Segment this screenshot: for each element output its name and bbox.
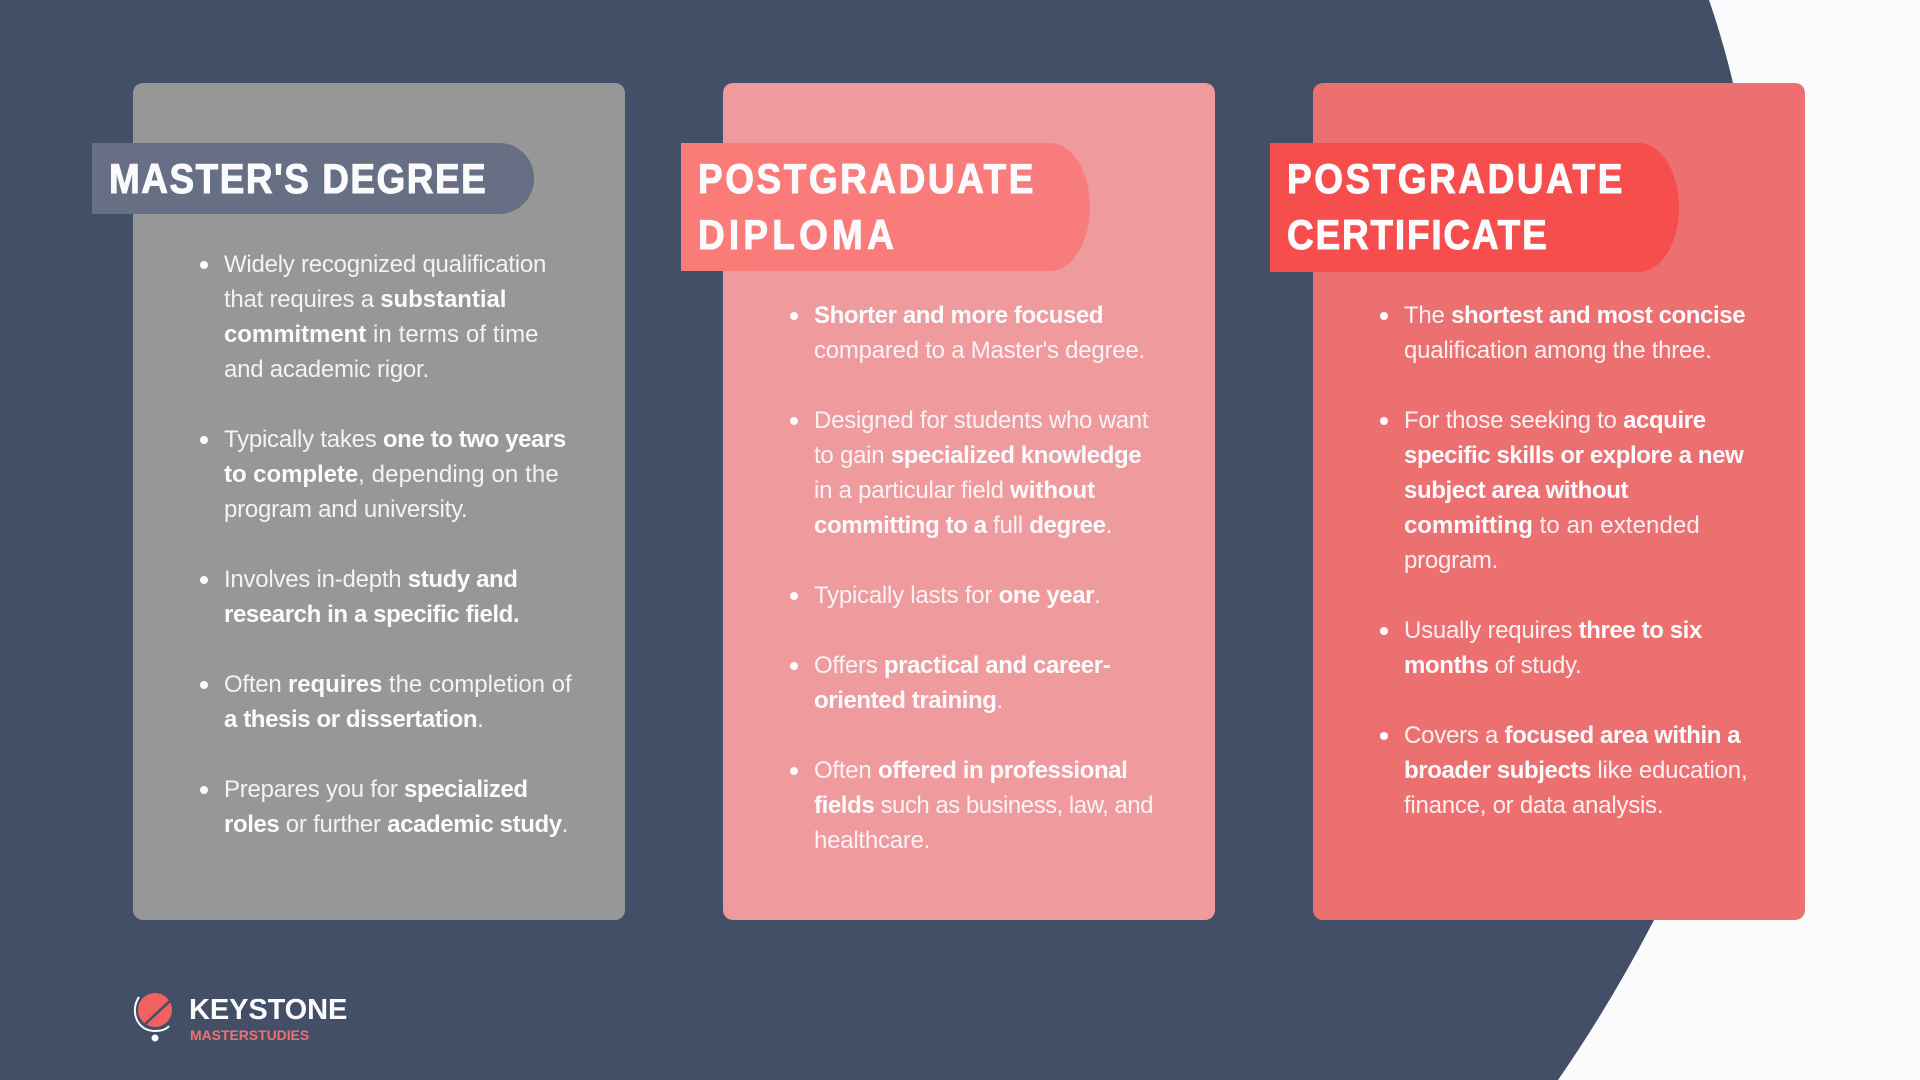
heading: postgraduate diploma: POSTGRADUATE [698, 155, 1036, 202]
panel: master's degree [133, 83, 625, 920]
text block: postgraduate diploma bullets [790, 302, 1153, 854]
text block: postgraduate certificate bullets: specific skills or explore a new [1404, 442, 1743, 469]
text block: master's degree bullets: and academic rigor. [224, 356, 429, 383]
text block: master's degree bullets: to complete, depending on the [224, 461, 559, 488]
text block: postgraduate certificate bullets: For those seeking to acquire [1404, 407, 1706, 434]
text block: postgraduate certificate bullets: qualification among the three. [1404, 337, 1712, 364]
text block: postgraduate certificate bullets [1380, 302, 1747, 819]
heading: postgraduate certificate: POSTGRADUATE [1287, 155, 1625, 202]
text block: postgraduate certificate bullets: committing to an extended [1404, 512, 1700, 539]
text block: master's degree bullets: Prepares you for specialized [224, 776, 528, 803]
logo [134, 993, 347, 1043]
text block: master's degree bullets: commitment in terms of time [224, 321, 539, 348]
text block: postgraduate diploma bullets: healthcare. [814, 827, 930, 854]
text block: postgraduate certificate bullets: subject area without [1404, 477, 1628, 504]
text block: postgraduate diploma bullets: Shorter and more focused [814, 302, 1103, 329]
text block: postgraduate diploma bullets: compared to a Master's degree. [814, 337, 1145, 364]
text block: master's degree bullets: roles or further academic study. [224, 811, 568, 838]
text block: postgraduate diploma bullets: Typically lasts for one year. [814, 582, 1101, 609]
text block: postgraduate certificate bullets: Usually requires three to six [1404, 617, 1702, 644]
text block: master's degree bullets: Often requires the completion of [224, 671, 572, 698]
heading: postgraduate diploma [681, 143, 1090, 271]
text block: postgraduate diploma bullets: committing to a full degree. [814, 512, 1112, 539]
panel: postgraduate certificate [1313, 83, 1805, 920]
text block: postgraduate diploma bullets: in a particular field without [814, 477, 1095, 504]
text block: master's degree bullets: program and university. [224, 496, 467, 523]
brand subtitle: MASTERSTUDIES [190, 1027, 309, 1043]
text block: master's degree bullets: that requires a substantial [224, 286, 506, 313]
panel: postgraduate diploma [723, 83, 1215, 920]
text block: postgraduate diploma bullets: fields such as business, law, and [814, 792, 1153, 819]
heading: postgraduate certificate [1270, 143, 1679, 272]
text block: master's degree bullets [200, 251, 572, 838]
text block: postgraduate certificate bullets: Covers a focused area within a [1404, 722, 1740, 749]
text block: master's degree bullets: Widely recognized qualification [224, 251, 546, 278]
text block: postgraduate diploma bullets: oriented training. [814, 687, 1003, 714]
text block: postgraduate diploma bullets: Offers practical and career- [814, 652, 1110, 679]
text block: postgraduate certificate bullets: program. [1404, 547, 1498, 574]
text block: postgraduate certificate bullets: months of study. [1404, 652, 1581, 679]
text block: master's degree bullets: research in a specific field. [224, 601, 519, 628]
text block: master's degree bullets: a thesis or dissertation. [224, 706, 484, 733]
text block: master's degree bullets: Involves in-depth study and [224, 566, 518, 593]
text block: postgraduate diploma bullets: Designed for students who want [814, 407, 1148, 434]
brand name: KEYSTONE [189, 994, 347, 1026]
text block: postgraduate certificate bullets: broader subjects like education, [1404, 757, 1747, 784]
heading: postgraduate certificate: CERTIFICATE [1287, 211, 1549, 258]
text block: postgraduate certificate bullets: finance, or data analysis. [1404, 792, 1663, 819]
heading: postgraduate diploma: DIPLOMA [698, 211, 898, 258]
text block: postgraduate diploma bullets: to gain specialized knowledge [814, 442, 1141, 469]
text block: master's degree bullets: Typically takes one to two years [224, 426, 566, 453]
text block: postgraduate certificate bullets: The shortest and most concise [1404, 302, 1745, 329]
heading: master's degree [92, 143, 534, 214]
heading: master's degree: MASTER'S DEGREE [109, 155, 487, 202]
text block: postgraduate diploma bullets: Often offered in professional [814, 757, 1127, 784]
icon: globe [134, 993, 172, 1042]
